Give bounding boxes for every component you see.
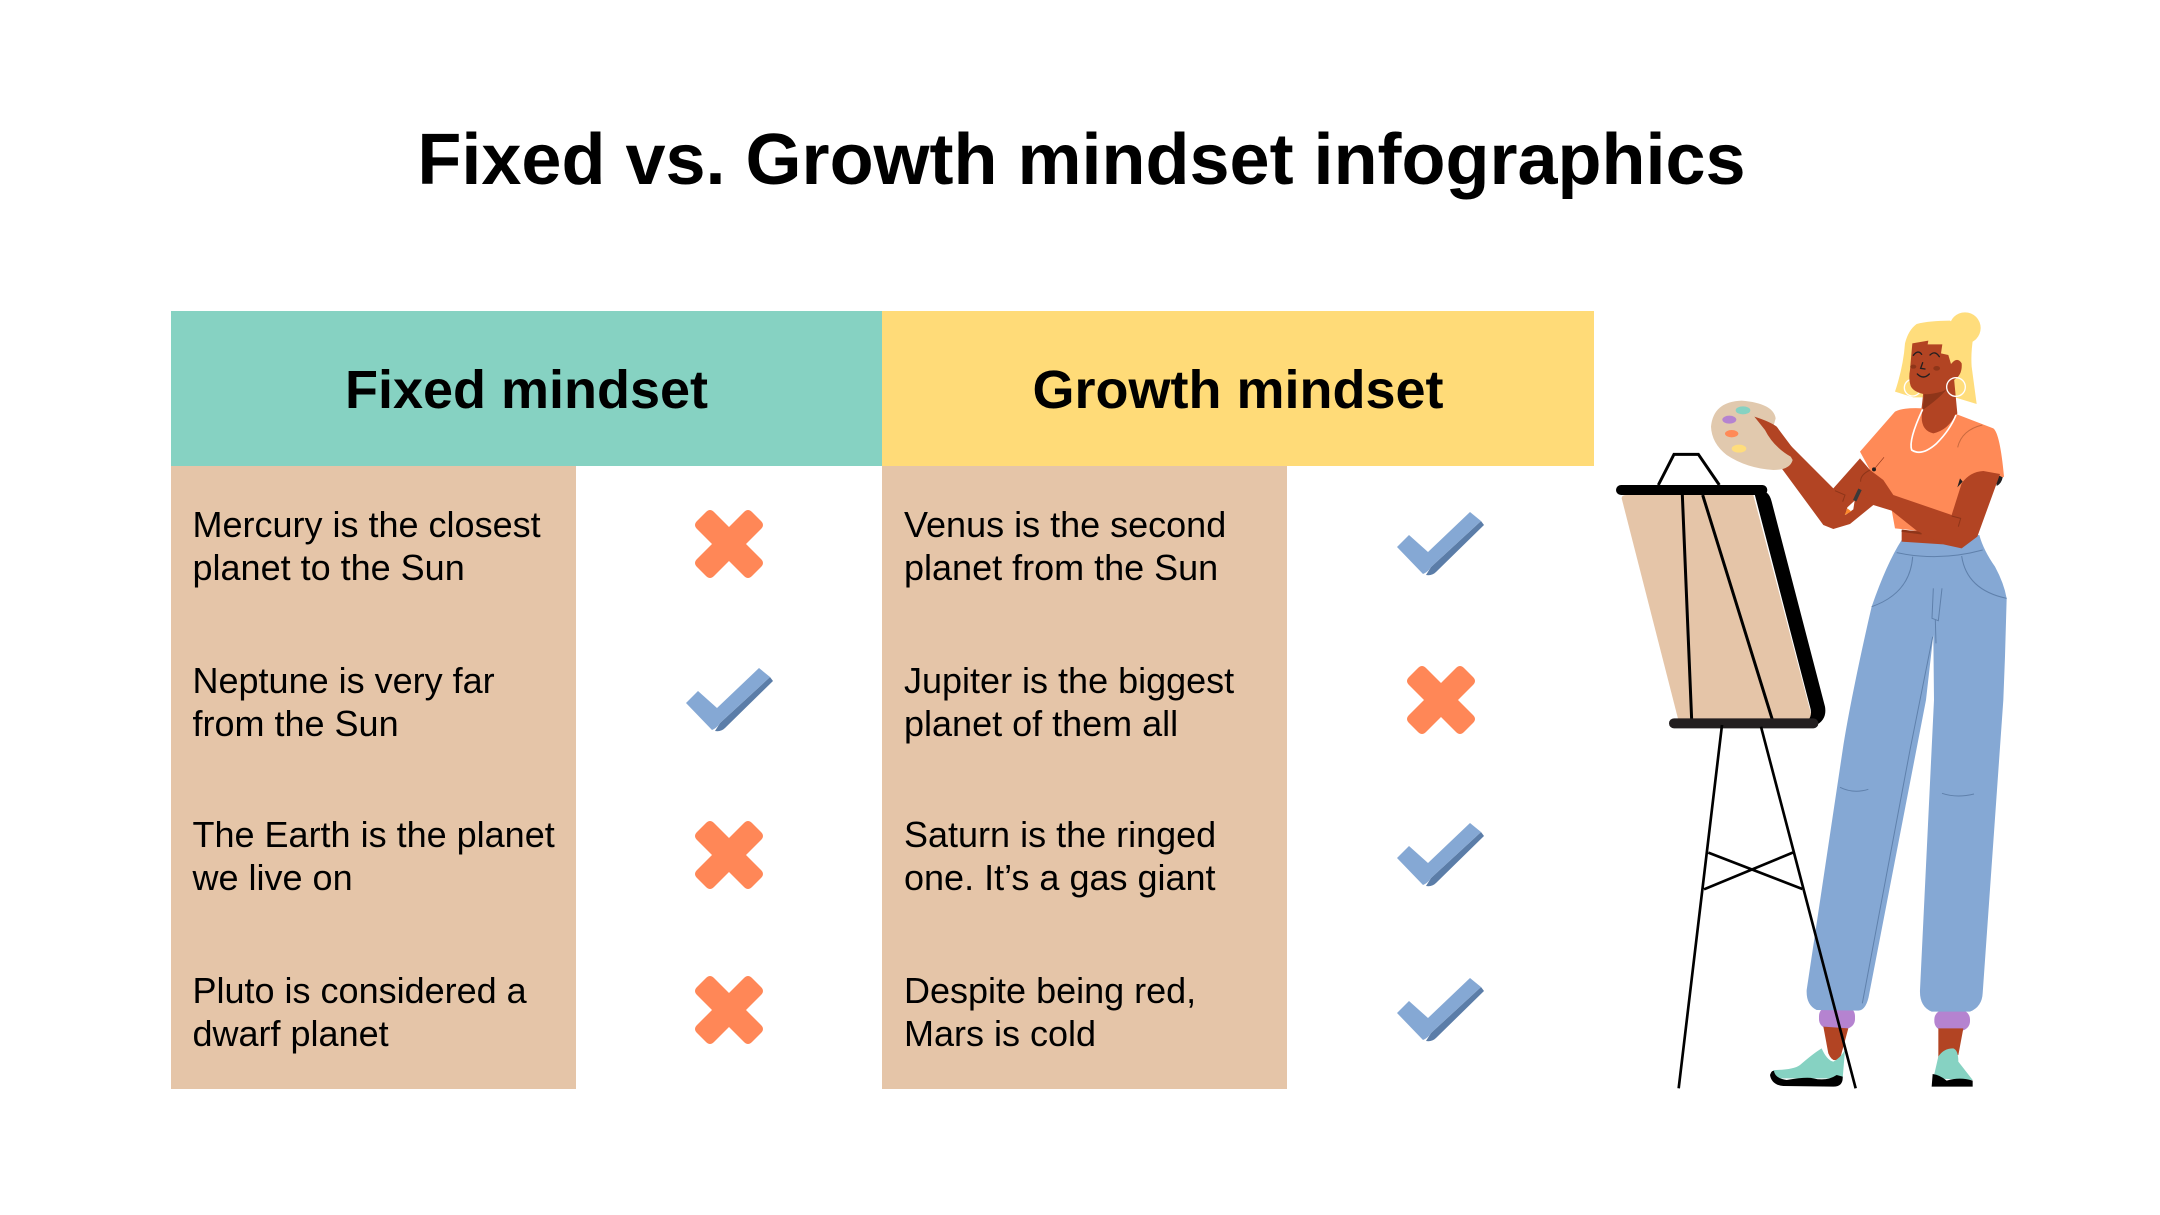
- woman: head: [1895, 312, 1981, 434]
- text: Pluto: Pluto is considered a: [192, 970, 527, 1011]
- text: Saturn: one. It’s a gas giant: [904, 857, 1216, 898]
- panel: growth mindset statements: [882, 466, 1287, 1089]
- text: Pluto: [192, 970, 527, 1054]
- text: Mars: Mars is cold: [904, 1013, 1096, 1054]
- header: growth mindset: [882, 311, 1594, 466]
- icon: cross, Mercury: [695, 510, 763, 578]
- illustration: painter at easel: [1621, 312, 2007, 1088]
- text: Saturn: Saturn is the ringed: [904, 814, 1216, 855]
- woman: paintbrush: [1835, 457, 1961, 527]
- raised arm: [1777, 427, 1890, 529]
- shirt fold: [1958, 425, 1982, 447]
- icon: cross, Pluto: [695, 976, 763, 1044]
- header: fixed mindset: [171, 311, 882, 466]
- icon: check, Saturn: [1397, 823, 1484, 886]
- shirt: [1860, 408, 2004, 531]
- woman: pointing finger: [1754, 417, 1797, 457]
- text: Jupiter: planet of them all: [904, 702, 1178, 744]
- title: Fixed vs. Growth mindset infographics: [417, 120, 1746, 200]
- icon: cross, Earth: [695, 821, 763, 889]
- necklace: [1911, 409, 1956, 452]
- text: Earth: The Earth is the planet: [192, 814, 555, 855]
- text: Neptune: from the Sun: [192, 702, 399, 744]
- icon: cross, Jupiter: [1407, 666, 1475, 734]
- text: Mars: [904, 970, 1196, 1054]
- text: Jupiter: [904, 660, 1234, 744]
- icon: check, Venus: [1397, 512, 1484, 575]
- facial features: [1910, 352, 1940, 377]
- text: Neptune: Neptune is very far: [192, 660, 495, 700]
- woman: torso and arms: [1777, 408, 2004, 548]
- forearm and hand holding brush: [1858, 470, 2000, 548]
- neck shadow: [1923, 382, 1952, 410]
- waist shadow: [1902, 531, 1922, 533]
- icon: check, Mars: [1397, 978, 1484, 1041]
- text: Saturn: [904, 814, 1216, 898]
- text: Venus: planet from the Sun: [904, 547, 1218, 588]
- left earring: [1904, 379, 1921, 396]
- panel: fixed mindset statements: [171, 466, 576, 1089]
- hair: [1895, 312, 1981, 404]
- woman: lower body: [1770, 535, 2007, 1087]
- easel canvas and frame: [1621, 454, 1825, 726]
- sleeve trim: [1957, 474, 2003, 487]
- text: Jupiter: Jupiter is the biggest: [904, 660, 1234, 700]
- text: Mercury: planet to the Sun: [192, 547, 465, 588]
- face and ear: [1909, 341, 1962, 394]
- text: Mercury: [192, 504, 541, 588]
- header: growth mindset: Growth mindset: [1032, 360, 1444, 420]
- text: Pluto: dwarf planet: [192, 1013, 389, 1054]
- palette: [1711, 401, 1793, 470]
- text: Venus: Venus is the second: [904, 504, 1226, 545]
- neck: [1919, 378, 1957, 434]
- text: Venus: [904, 504, 1226, 588]
- icon: check, Neptune: [686, 668, 773, 731]
- text: Mercury: Mercury is the closest: [192, 504, 541, 545]
- text: Mars: Despite being red,: [904, 970, 1196, 1011]
- header: fixed mindset: Fixed mindset: [345, 360, 708, 420]
- right earring: [1947, 378, 1965, 396]
- easel legs: [1679, 725, 1856, 1088]
- text: Neptune: [192, 660, 495, 744]
- text: Earth: [192, 814, 555, 898]
- text: Earth: we live on: [192, 857, 353, 898]
- midriff: [1902, 531, 1943, 544]
